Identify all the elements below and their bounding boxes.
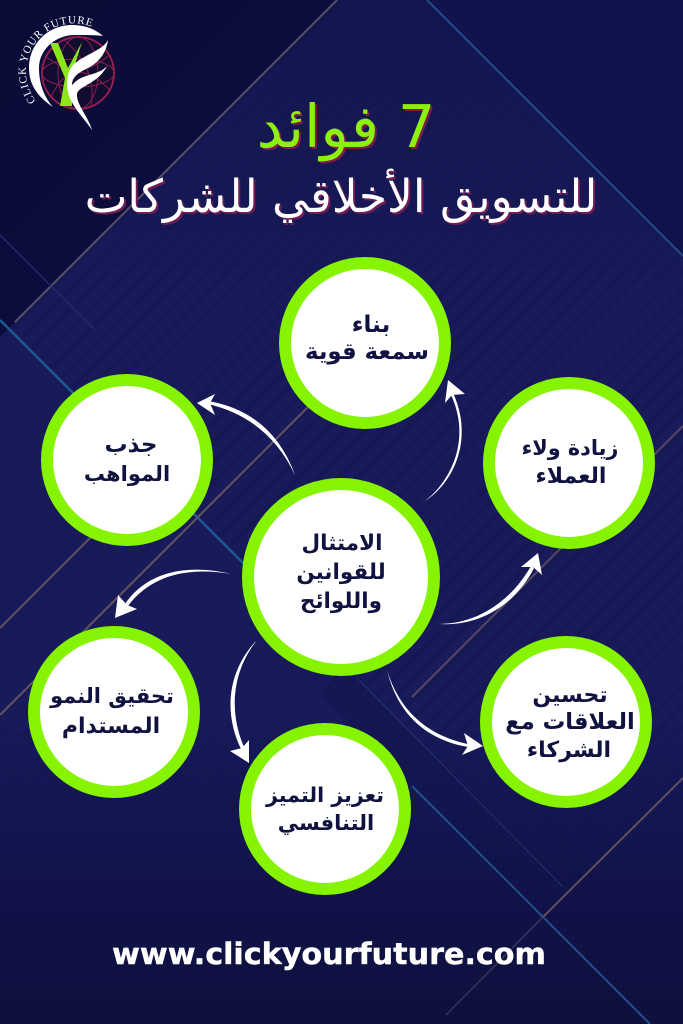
circle: partner relations: تحسين: [532, 683, 608, 708]
circle: sustainable growth: [34, 632, 194, 792]
arrow: to attract talent: [197, 394, 295, 475]
circle: reputation: بناء: [352, 312, 390, 338]
circle: compliance (centre): الامتثال: [302, 531, 382, 556]
arrow: to sustainable growth: [115, 570, 231, 618]
circle: attract talent: جذب: [105, 432, 157, 458]
website url: www.clickyourfuture.com: [112, 937, 546, 971]
arrow: to partner relations: [387, 670, 483, 755]
circle: reputation: سمعة قوية: [305, 339, 429, 365]
circle: compliance (centre): [248, 484, 434, 670]
circle: competitive distinction: التنافسي: [278, 811, 374, 835]
circle: sustainable growth: المستدام: [62, 714, 160, 739]
circle: customer loyalty: العملاء: [536, 464, 606, 489]
circle: reputation: [285, 263, 445, 423]
circle: partner relations: [486, 642, 646, 802]
circle: customer loyalty: زيادة ولاء: [522, 436, 618, 460]
arrow: to customer loyalty: [439, 553, 542, 624]
circle: competitive distinction: [245, 729, 405, 889]
circle: attract talent: المواهب: [84, 462, 170, 486]
circle: customer loyalty: [489, 383, 649, 543]
circle: sustainable growth: تحقيق النمو: [49, 684, 174, 708]
title: [85, 92, 597, 224]
circle: partner relations: الشركاء: [527, 738, 611, 763]
circle: attract talent: [47, 380, 207, 540]
circle: competitive distinction: تعزيز التميز: [265, 783, 384, 807]
logo: Click Your Future: [18, 16, 115, 130]
circle: compliance (centre): للقوانين: [296, 560, 386, 585]
circle: compliance (centre): واللوائح: [300, 589, 382, 614]
arrow: to competitive distinction: [230, 640, 257, 763]
arrow: to reputation: [425, 380, 465, 501]
title line 1: 7 فوائد: [257, 92, 435, 162]
title line 2: للتسويق الأخلاقي للشركات: [85, 168, 597, 224]
circle: partner relations: العلاقات مع: [505, 709, 635, 735]
logo: Click Your Future: CLICK YOUR FUTURE: [18, 16, 93, 104]
